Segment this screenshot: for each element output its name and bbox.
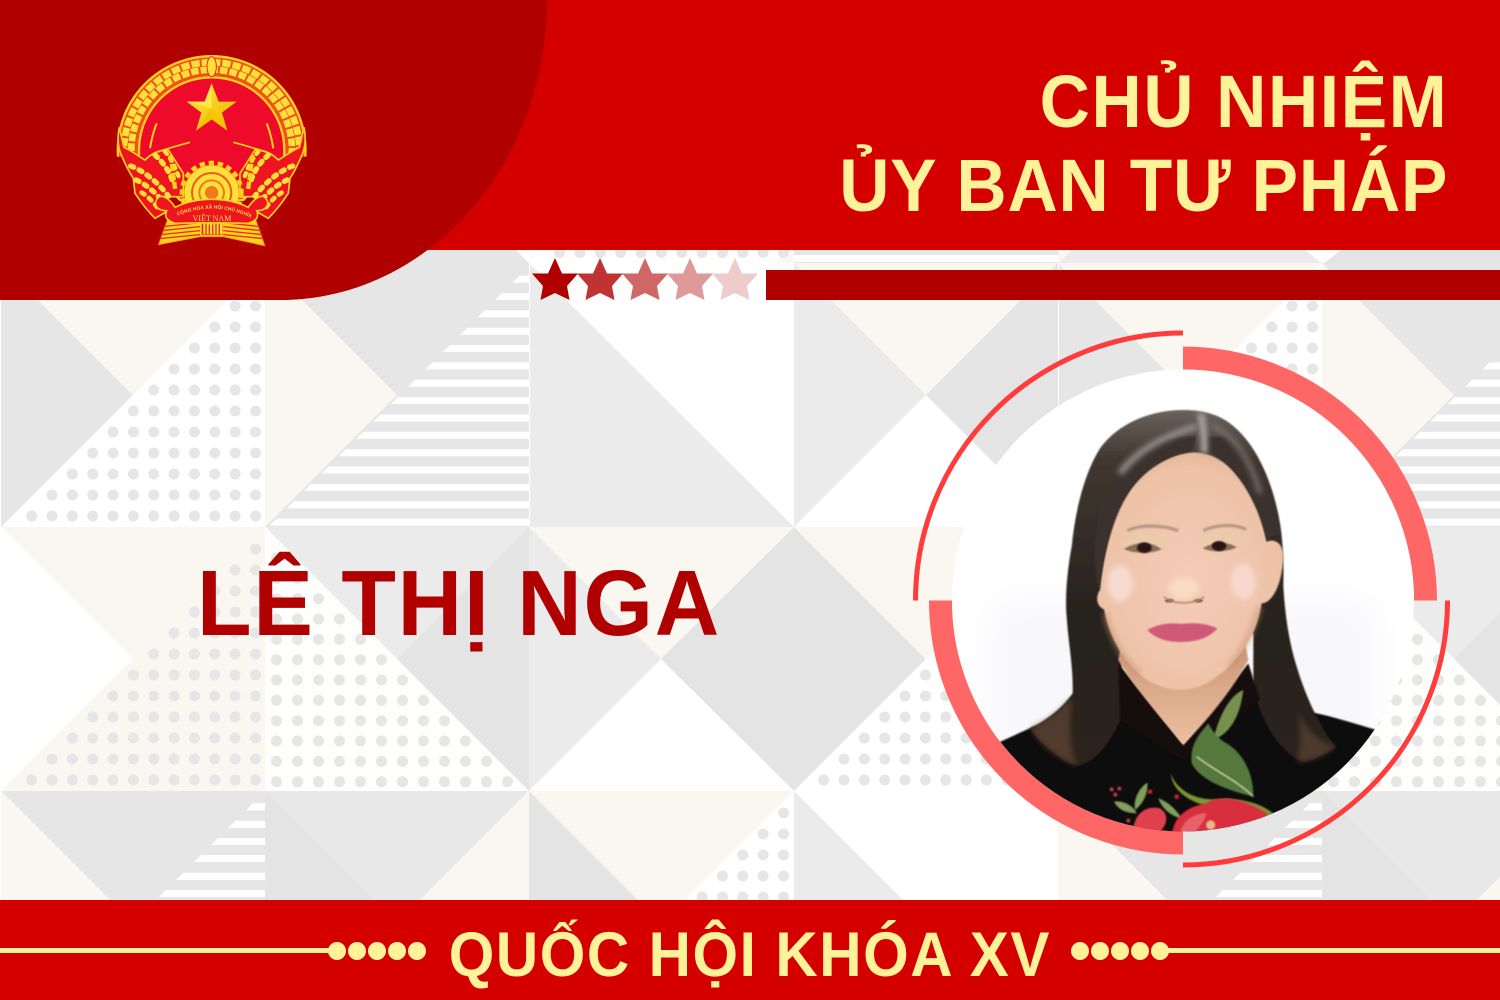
lips xyxy=(1147,623,1217,642)
footer: right divider line and dots xyxy=(1071,942,1500,960)
embroidery flowers xyxy=(1108,786,1268,832)
footer band xyxy=(0,900,1500,1000)
repeating tile xyxy=(1,263,1058,900)
title line 1: CHỦ NHIỆM xyxy=(1040,60,1447,143)
title: position xyxy=(839,60,1447,227)
emblem: wheat ring xyxy=(116,55,307,157)
clothes xyxy=(1000,701,1376,832)
jaw shading xyxy=(1105,607,1260,674)
emblem: right wheat sheaf and ribbon xyxy=(233,123,305,218)
nose xyxy=(1164,578,1204,603)
neck xyxy=(1118,633,1248,745)
top band of pattern xyxy=(265,244,1500,264)
hair back xyxy=(1030,410,1336,766)
title line 2: ỦY BAN TƯ PHÁP xyxy=(839,144,1447,227)
dark red bar beside stars xyxy=(766,270,1500,300)
eyes xyxy=(1124,541,1237,553)
row 2 xyxy=(1,791,265,900)
icon: national emblem of Vietnam xyxy=(116,55,307,246)
footer: left divider line and dots xyxy=(0,942,426,960)
header: dark red rounded corner panel xyxy=(0,0,547,300)
ring: thin arcs xyxy=(916,333,1448,865)
emblem: base rays xyxy=(159,218,265,246)
eye sockets xyxy=(1122,534,1168,550)
seam lines xyxy=(530,263,1058,527)
hair tips xyxy=(1030,697,1077,766)
emblem: star xyxy=(187,83,237,131)
portrait photo illustration xyxy=(950,368,1416,867)
emblem: banner with text xyxy=(154,196,268,224)
hair parting highlights xyxy=(1095,436,1197,590)
background geometric pattern xyxy=(0,244,1500,900)
ring: thick arcs xyxy=(940,358,1426,843)
name heading: LÊ THỊ NGA xyxy=(197,551,719,655)
portrait with ring xyxy=(916,333,1448,867)
eyebrows xyxy=(1127,526,1178,531)
cheek highlights xyxy=(1107,565,1133,602)
row 0 xyxy=(1,263,133,527)
row 1 xyxy=(1,527,265,791)
footer: heading: QUỐC HỘI KHÓA XV xyxy=(449,919,1050,989)
five fading stars xyxy=(532,258,758,300)
header: red band xyxy=(0,0,1500,250)
emblem: cog wheel xyxy=(182,163,241,222)
emblem: banner with text: CỘNG HÒA XÃ HỘI CHỦ NGHĨA xyxy=(177,204,252,218)
collar xyxy=(1118,663,1260,760)
face xyxy=(1097,452,1283,690)
emblem: banner with text: VIỆT NAM xyxy=(193,213,231,223)
emblem: left wheat sheaf and ribbon xyxy=(118,123,190,218)
embroidery leaves xyxy=(1114,690,1273,820)
emblem: red disc xyxy=(139,57,284,200)
